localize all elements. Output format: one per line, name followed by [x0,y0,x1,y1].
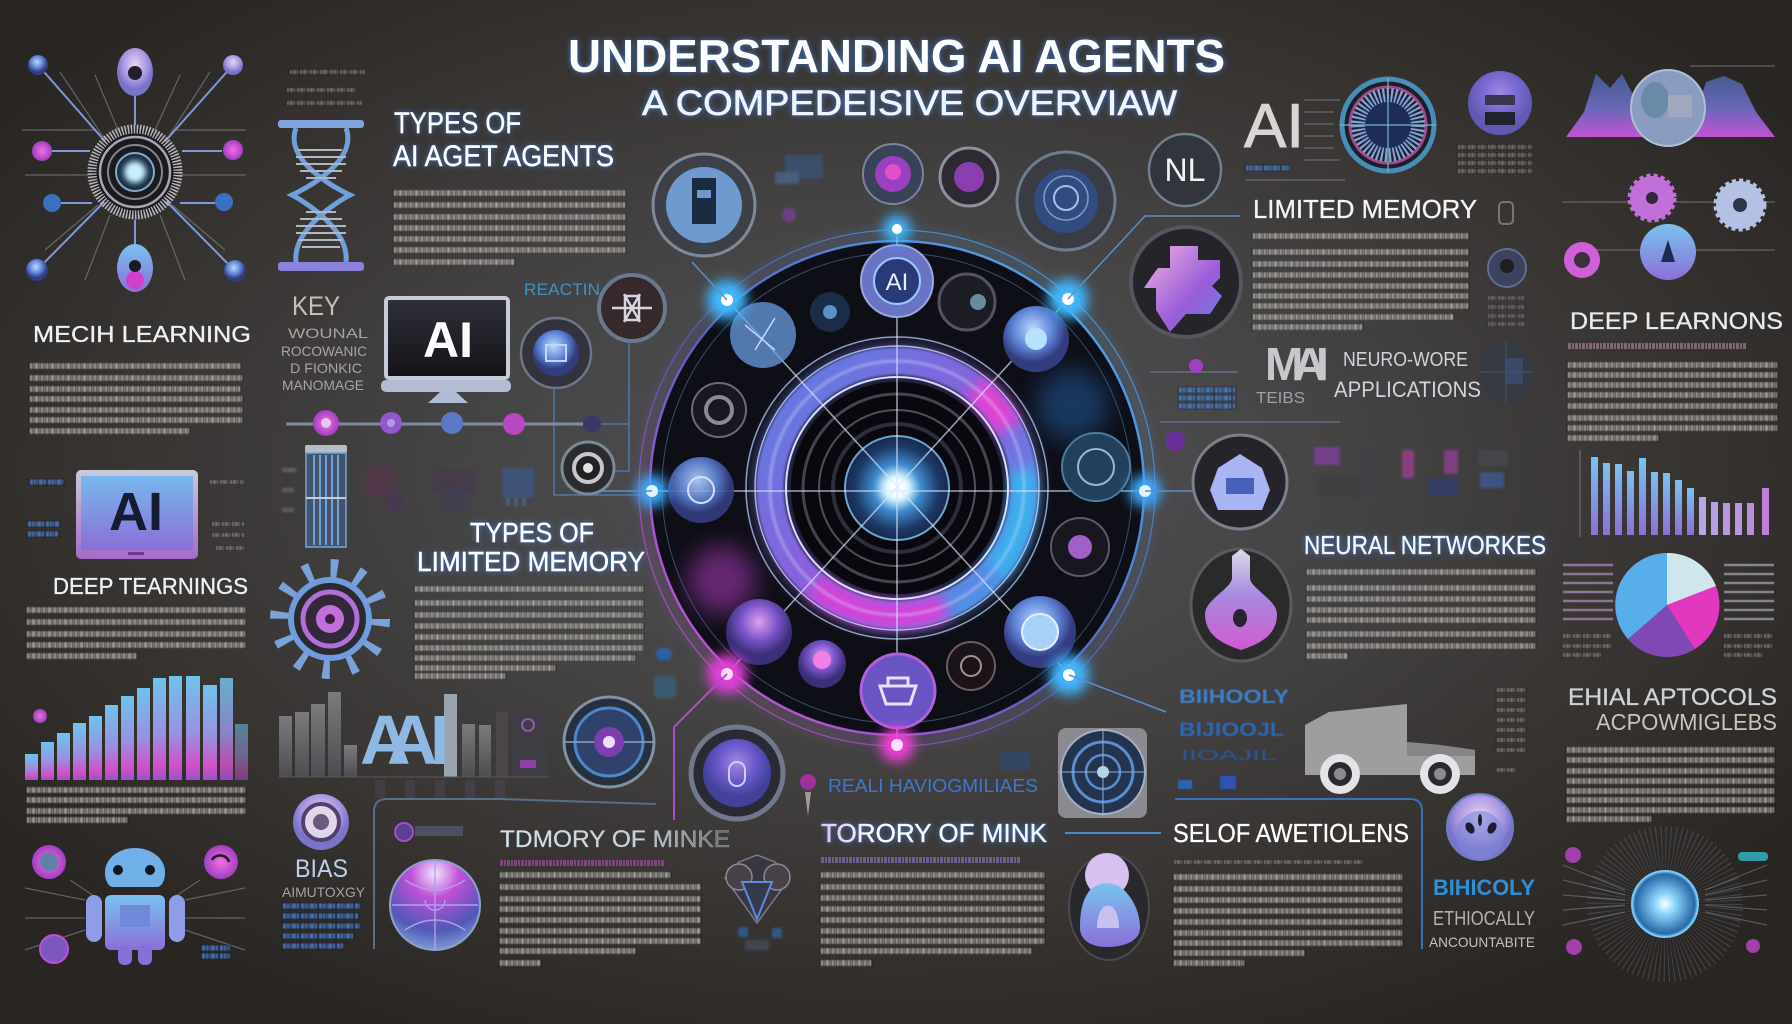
icon: AI monitor: AI [423,312,473,368]
icon: AI monitor [381,298,511,403]
block: blue ethically text: BIIHOOLY [1179,687,1289,708]
icon: circle blue [1017,152,1115,250]
icon: truck [1305,704,1475,794]
title: A COMPEDEISIVE OVERVIAW [642,84,1177,123]
label: blue real line: REALI HAVIOGMILIAES [828,776,1038,796]
icon: bias target [293,794,349,850]
small icons: beside right memory [1488,202,1526,324]
heading: deep learnings: DEEP TEARNINGS [53,573,248,599]
icon: diamond cluster [725,855,790,923]
icon: gear network [1562,176,1775,280]
panel: central AI hub [636,215,1161,762]
band highlight magenta upper right [975,388,1008,428]
panel frame: bias section [374,799,656,949]
icon: AI tablet: AI [109,482,163,542]
small block: robot note [202,948,230,956]
small blocks: tablet side notes [28,482,244,548]
text block: deep learnings [27,610,245,656]
chart: mountain and sphere [1566,66,1775,146]
main band [770,361,1024,615]
bar chart: gradient bars [25,676,248,780]
glow: blue on right [1036,369,1108,441]
icon: ring node [562,442,614,494]
text block: key list: D FIONKIC [290,360,362,376]
heading: types of limited memory [417,517,645,577]
title: UNDERSTANDING AI AGENTS [568,30,1225,82]
icon: brain sphere [390,860,480,950]
connector: blue line to selof [1065,832,1161,834]
connector lines [554,341,640,495]
text block: selof [1174,862,1402,963]
core [845,436,949,540]
bar chart: grey with AI mark: AAI [360,701,449,779]
label: ethically stack: ETHIOCALLY [1433,908,1535,930]
heading: MAI applications: TEIBS [1256,390,1305,407]
text block: key list: WOUNAL [288,325,368,341]
heading: ethical protocols: EHIAL APTOCOLS [1568,684,1777,711]
icon: circle H [653,154,755,256]
icon: bottom node [117,244,153,292]
dark inner [791,382,1003,594]
icon: blue hex disc [1193,435,1287,529]
icon: gear [280,569,380,669]
label: autonomy: AIMUTOXGY [282,884,366,900]
icon: circle magenta [863,144,923,204]
band light core [770,361,1024,615]
heading: types of AI agents [393,107,614,173]
text block: neural networks [1307,572,1535,656]
spokes [652,229,1145,747]
icon row: top of hub [653,144,1115,256]
text block: pie right [1724,565,1774,655]
glowing junction nodes [636,215,1161,762]
heading: deep learnons: DEEP LEARNONS [1570,308,1783,335]
heading: types of AI agents: AI AGET AGENTS [393,140,614,173]
label: reactive: REACTIN [524,280,600,299]
decorative lines beside AI [1246,100,1345,180]
icon: reactive circle [599,275,665,341]
icon: NL badge: NL [1165,152,1205,188]
small icons: beside limited memory [654,648,676,698]
icon: dim sphere [1479,341,1533,403]
title [568,30,1225,123]
heading: tomory of minke: TDMORY OF MINKE [500,826,730,853]
heading: MAI applications: MAI [1265,338,1329,390]
text block: key list: ROCOWANIC [281,343,367,359]
connectors from hub [600,216,1240,712]
text block: tomory [500,863,700,963]
timeline [286,410,601,436]
heading: selof awetiolens: SELOF AWETIOLENS [1173,818,1409,848]
icon: AI tablet [76,470,198,559]
heading: types of AI agents: TYPES OF [394,107,521,140]
icon: circle pink [940,148,998,206]
icon: magenta dot pin [800,774,816,816]
icon: hub-side calibration frame [1058,728,1147,818]
icon: blue disc [521,318,591,388]
heading: MAI applications: APPLICATIONS [1334,377,1481,402]
glow: pink lower left [688,546,756,614]
text block: chart caption [27,790,245,820]
icon: small toggle [395,823,463,841]
heading: ethical protocols: ACPOWMIGLEBS [1596,709,1777,735]
text block: small header notes [287,72,365,103]
text block: key list: MANOMAGE [282,377,364,393]
connector: purple [674,674,727,820]
text block: torory [821,860,1045,963]
heading: torory of mink: TORORY OF MINK [821,818,1048,848]
text block: truck side [1497,690,1527,770]
text block: key list [281,291,368,393]
text block: bias [283,906,360,946]
node circles in the ring: AI [886,269,908,296]
heading: neural networkes: NEURAL NETWORKES [1304,530,1546,560]
icon row: small devices [282,466,534,510]
text block: limited memory [415,589,643,676]
icon: purple disc [1468,71,1532,135]
band highlight cyan right [995,470,1024,570]
small icons: beside label [1000,752,1030,770]
text block: types of agents [394,193,625,262]
block: blue ethically text: BIJIOOJL [1179,720,1284,741]
panel frame: ethically [1175,799,1422,949]
icon: lens purple [691,727,783,819]
label: ethically stack: BIHICOLY [1433,875,1535,900]
icon: flask [1191,549,1291,661]
label: ethically stack: ANCOUNTABITE [1429,934,1535,950]
dark disc [650,241,1144,735]
text block: limited memory right [1253,236,1468,327]
icon: radiating orb [1563,847,1768,960]
icon: blur block [775,155,823,222]
small icons: below diamond [738,927,782,950]
outer glow [643,234,1151,742]
heading: types of limited memory: TYPES OF [470,517,594,548]
text block: key list: KEY [292,291,340,321]
icon: robot [25,848,245,965]
icon row: blurry applications [1314,447,1508,497]
text block: mech learning [30,366,243,431]
text block: deep learnons [1568,346,1777,438]
heading: mech learning: MECIH LEARNING [33,321,251,347]
icon: pin and block [1150,359,1340,451]
label: bias: BIAS [295,855,348,883]
heading: limited memory: LIMITED MEMORY [1253,194,1477,224]
heading: ethical protocols [1568,684,1777,735]
icon: AI radar [1340,78,1436,172]
icon: DNA hourglass [278,120,364,271]
text block: purple disc note [1458,147,1532,171]
label: ethically stack [1429,875,1535,950]
heading: MAI applications: NEURO-WORE [1343,349,1468,371]
icon: ball [1447,794,1513,860]
bar chart: grey with AI mark [279,692,549,798]
text block: ethical [1567,750,1775,819]
heading: big AI label: AI [1244,92,1304,161]
icon: robot eyes [32,845,238,963]
icon: top node [117,48,153,96]
block: blue ethically text [1178,687,1289,789]
icon: server cylinder [305,445,347,547]
band highlight magenta lower left [815,585,945,615]
text block: pie left [1563,565,1613,655]
icon: compass disc [564,697,654,787]
icon: purple knob [1069,853,1149,960]
icon: NL badge [1149,134,1221,206]
heading: types of limited memory: LIMITED MEMORY [417,546,645,577]
icon: puzzle [1131,227,1241,337]
chart: pie [1615,553,1720,657]
node circles in the ring [668,245,1130,728]
small block: AI note [1246,166,1291,170]
block: blue ethically text: IIOAJIL [1181,747,1276,764]
panel: neural hub illustration [22,48,246,292]
icon: central ring [92,129,178,215]
band glow [770,361,1024,615]
heading: MAI applications [1256,338,1481,407]
bar chart: descending [1580,450,1769,537]
